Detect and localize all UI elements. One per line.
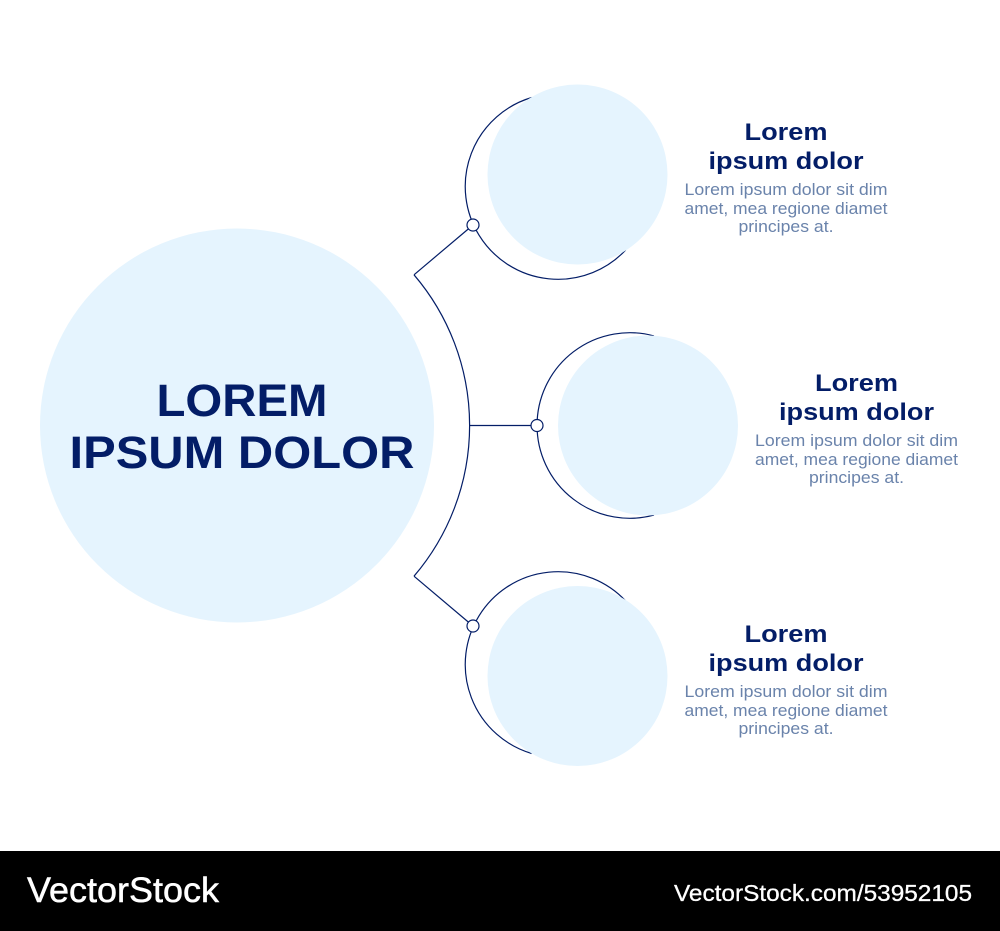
item 1 text: Lorem <box>744 119 828 146</box>
item 2 text: Lorem ipsum dolor sit dim <box>755 431 958 450</box>
item 2 text <box>755 370 958 487</box>
item 3 text <box>684 621 888 738</box>
item 3 text: Lorem <box>744 621 828 648</box>
item 2 text: Lorem <box>815 370 898 397</box>
item 2 text: amet, mea regione diamet <box>755 450 958 469</box>
watermark footer bar: VectorStock <box>27 871 220 910</box>
item 1 text <box>684 119 888 236</box>
item 1 text: ipsum dolor <box>708 148 864 175</box>
item 3 text: ipsum dolor <box>708 650 864 677</box>
item 3 text: Lorem ipsum dolor sit dim <box>684 682 888 701</box>
item 3: circle, outline and node <box>465 572 668 766</box>
main circle with title <box>40 228 434 622</box>
item 1: circle, outline and node <box>465 84 668 279</box>
main circle with title: IPSUM DOLOR <box>70 427 414 478</box>
item 2 text: ipsum dolor <box>779 399 934 426</box>
item 2 text: principes at. <box>809 468 904 487</box>
item 1 text: Lorem ipsum dolor sit dim <box>684 180 888 199</box>
main circle with title: LOREM <box>156 375 328 426</box>
item 3 text: amet, mea regione diamet <box>684 701 888 720</box>
connector lines <box>414 225 537 626</box>
watermark footer bar: VectorStock.com/53952105 <box>674 880 972 906</box>
item 2: circle, outline and node <box>531 333 738 518</box>
watermark footer bar <box>0 851 1000 931</box>
item 1 text: principes at. <box>738 217 834 236</box>
item 1 text: amet, mea regione diamet <box>684 199 888 218</box>
item 3 text: principes at. <box>738 719 834 738</box>
